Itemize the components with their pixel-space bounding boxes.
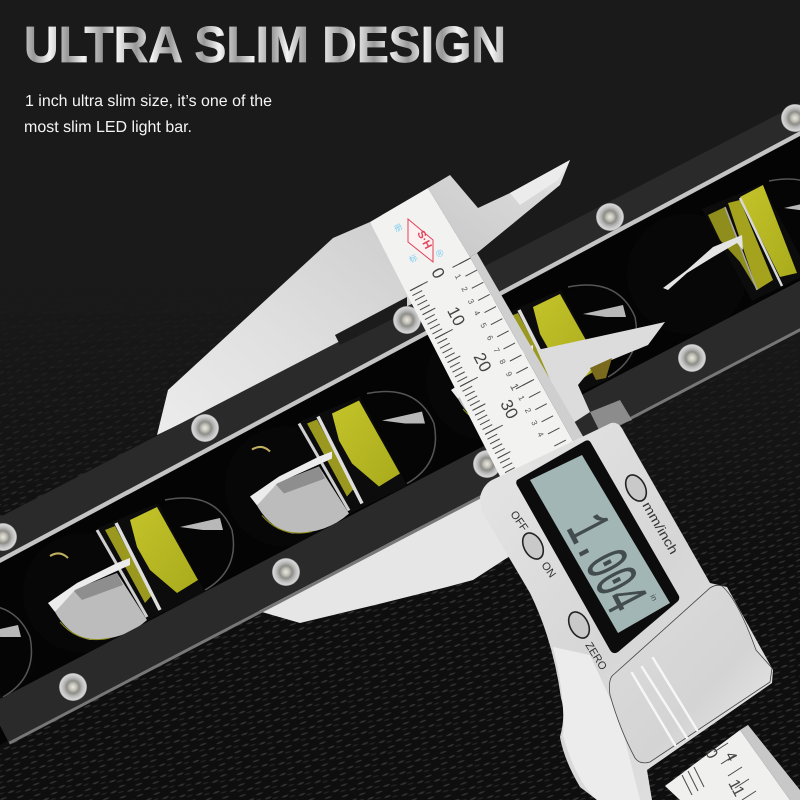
- lens 3: [426, 285, 640, 440]
- millimetre numerals: 30: [496, 397, 522, 422]
- inch numerals: 3: [529, 419, 540, 428]
- zero button: [564, 608, 594, 642]
- inch numerals: 6: [485, 334, 495, 342]
- LCD reading: 1.004: [549, 504, 658, 625]
- inch numerals: 8: [497, 358, 508, 366]
- caliper upper jaw: [157, 222, 420, 435]
- inch numerals: 9: [504, 370, 514, 379]
- lens 4: [627, 179, 800, 334]
- display frame: [516, 440, 679, 653]
- millimetre numerals: 20: [470, 350, 495, 375]
- lens 2: [225, 392, 439, 546]
- logo: ®: [434, 247, 446, 261]
- LCD unit: in: [648, 593, 659, 602]
- millimetre numerals: 10: [443, 304, 469, 329]
- lens 1: [23, 498, 237, 653]
- inch numerals: [450, 273, 546, 440]
- logo: 标: [408, 253, 419, 265]
- inch numerals: 4: [472, 309, 482, 318]
- caliper body: [480, 423, 773, 800]
- inch numerals: 7: [491, 346, 502, 355]
- cover ridges: [632, 658, 697, 745]
- upper chrome strip: [0, 131, 800, 563]
- blade highlight: [510, 160, 570, 205]
- off/on button: [518, 529, 548, 563]
- description text: 1 inch ultra slim size, it’s one of the: [25, 93, 272, 110]
- background: [0, 405, 800, 800]
- body shell: [480, 423, 773, 800]
- ruler chrome edge: [470, 253, 588, 450]
- inch numerals: 2: [523, 407, 533, 415]
- zero label: ZERO: [582, 640, 609, 673]
- lower ruler section: [665, 725, 800, 800]
- inch numerals: 1: [453, 273, 463, 281]
- on label: ON: [539, 560, 558, 580]
- caliper lower jaw: [255, 485, 510, 623]
- title: ULTRA SLIM DESIGN: [24, 16, 506, 73]
- description text: [24, 93, 272, 136]
- inch numerals: 2: [459, 285, 470, 294]
- sliding jaw strip over lens: [537, 322, 665, 432]
- lower rail edge: [9, 186, 800, 745]
- slider cover: [609, 585, 772, 763]
- lower rail screws: [59, 344, 706, 701]
- ruler face: [370, 188, 578, 492]
- inch numerals: 4: [535, 430, 546, 439]
- lens far left: [0, 605, 35, 760]
- lower ruler section: 0: [701, 746, 721, 762]
- scale markings: [411, 255, 563, 475]
- off label: OFF: [508, 509, 530, 534]
- mm/inch label: mm/inch: [639, 499, 681, 557]
- inch numerals: 5: [478, 321, 489, 330]
- caliper head and blade: [428, 160, 570, 257]
- inch numerals: 3: [466, 298, 476, 306]
- body highlight: [553, 647, 640, 800]
- ruler: [370, 188, 588, 492]
- inch numerals: 1: [507, 382, 521, 393]
- logo: S·H: [414, 229, 434, 251]
- millimetre numerals: 0: [427, 264, 449, 282]
- LCD screen: [530, 455, 670, 633]
- upper rail raised section: [335, 297, 407, 345]
- mm/inch button: [621, 471, 651, 505]
- inch ticks: [465, 261, 563, 448]
- description text: most slim LED light bar.: [24, 119, 192, 136]
- logo: 册: [393, 222, 404, 234]
- inch numerals: 1: [516, 394, 527, 403]
- millimetre ticks: [415, 288, 512, 475]
- millimetre numerals: [424, 264, 522, 424]
- upper rail screws: [0, 104, 800, 551]
- lower ruler section: 11: [724, 777, 747, 800]
- upper rail: [0, 103, 800, 558]
- bar interior: [0, 128, 800, 745]
- lower ruler section: 4: [721, 749, 740, 764]
- lower rail: [0, 149, 800, 742]
- logo: [393, 219, 446, 265]
